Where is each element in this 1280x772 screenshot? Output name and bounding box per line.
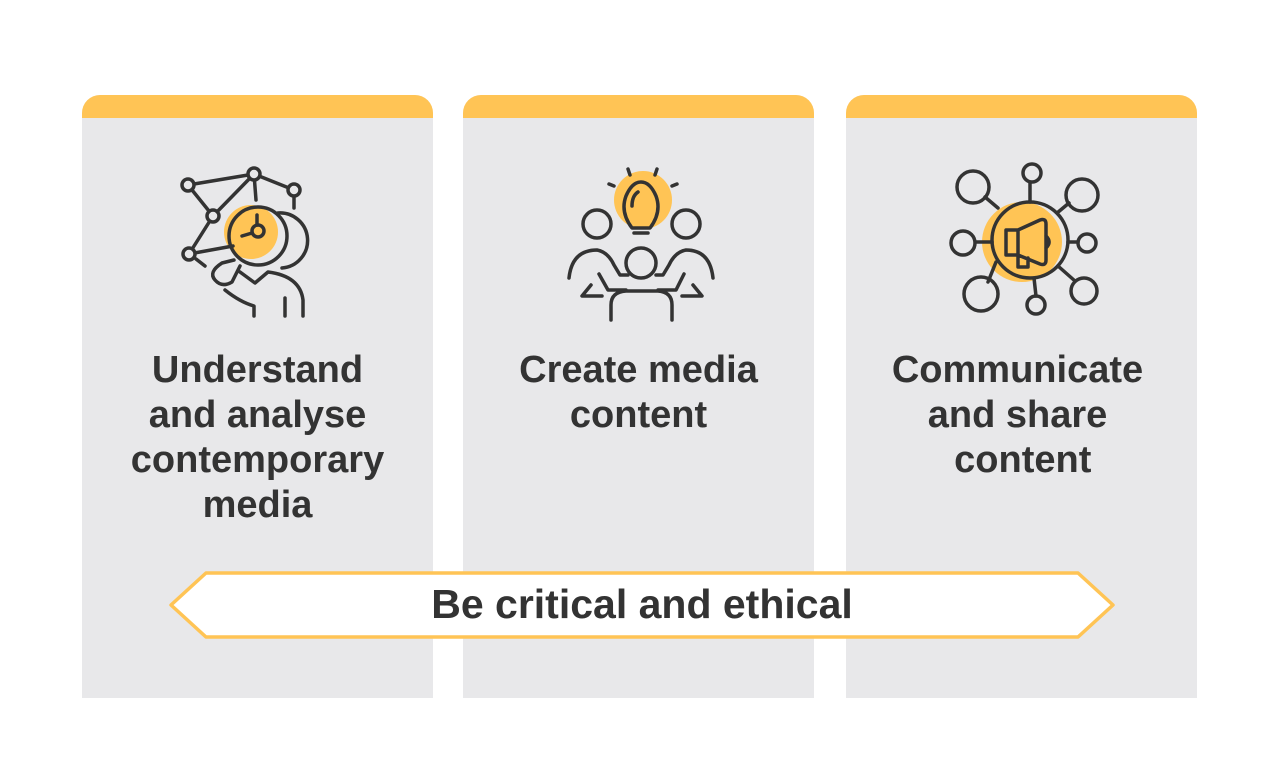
heading: communicate: Communicate xyxy=(892,349,1143,391)
heading: understand: contemporary xyxy=(131,439,384,481)
heading: create: content xyxy=(570,394,707,436)
heading: communicate xyxy=(892,349,1143,481)
icon: communicate xyxy=(951,164,1098,314)
heading: understand: media xyxy=(203,484,312,526)
banner: be critical and ethical xyxy=(169,571,1115,639)
heading: communicate: content xyxy=(954,439,1091,481)
heading: understand: and analyse xyxy=(149,394,366,436)
heading: understand: Understand xyxy=(152,349,363,391)
heading: communicate: and share xyxy=(928,394,1107,436)
panel: create xyxy=(463,95,814,698)
panel: understand xyxy=(82,95,433,698)
icon: analyse xyxy=(182,168,308,316)
heading: understand xyxy=(131,349,384,526)
heading: create xyxy=(519,349,758,436)
panel: communicate xyxy=(846,95,1197,698)
banner: be critical and ethical: Be critical and ethical xyxy=(431,581,853,627)
icon: create xyxy=(569,169,713,320)
heading: create: Create media xyxy=(519,349,758,391)
